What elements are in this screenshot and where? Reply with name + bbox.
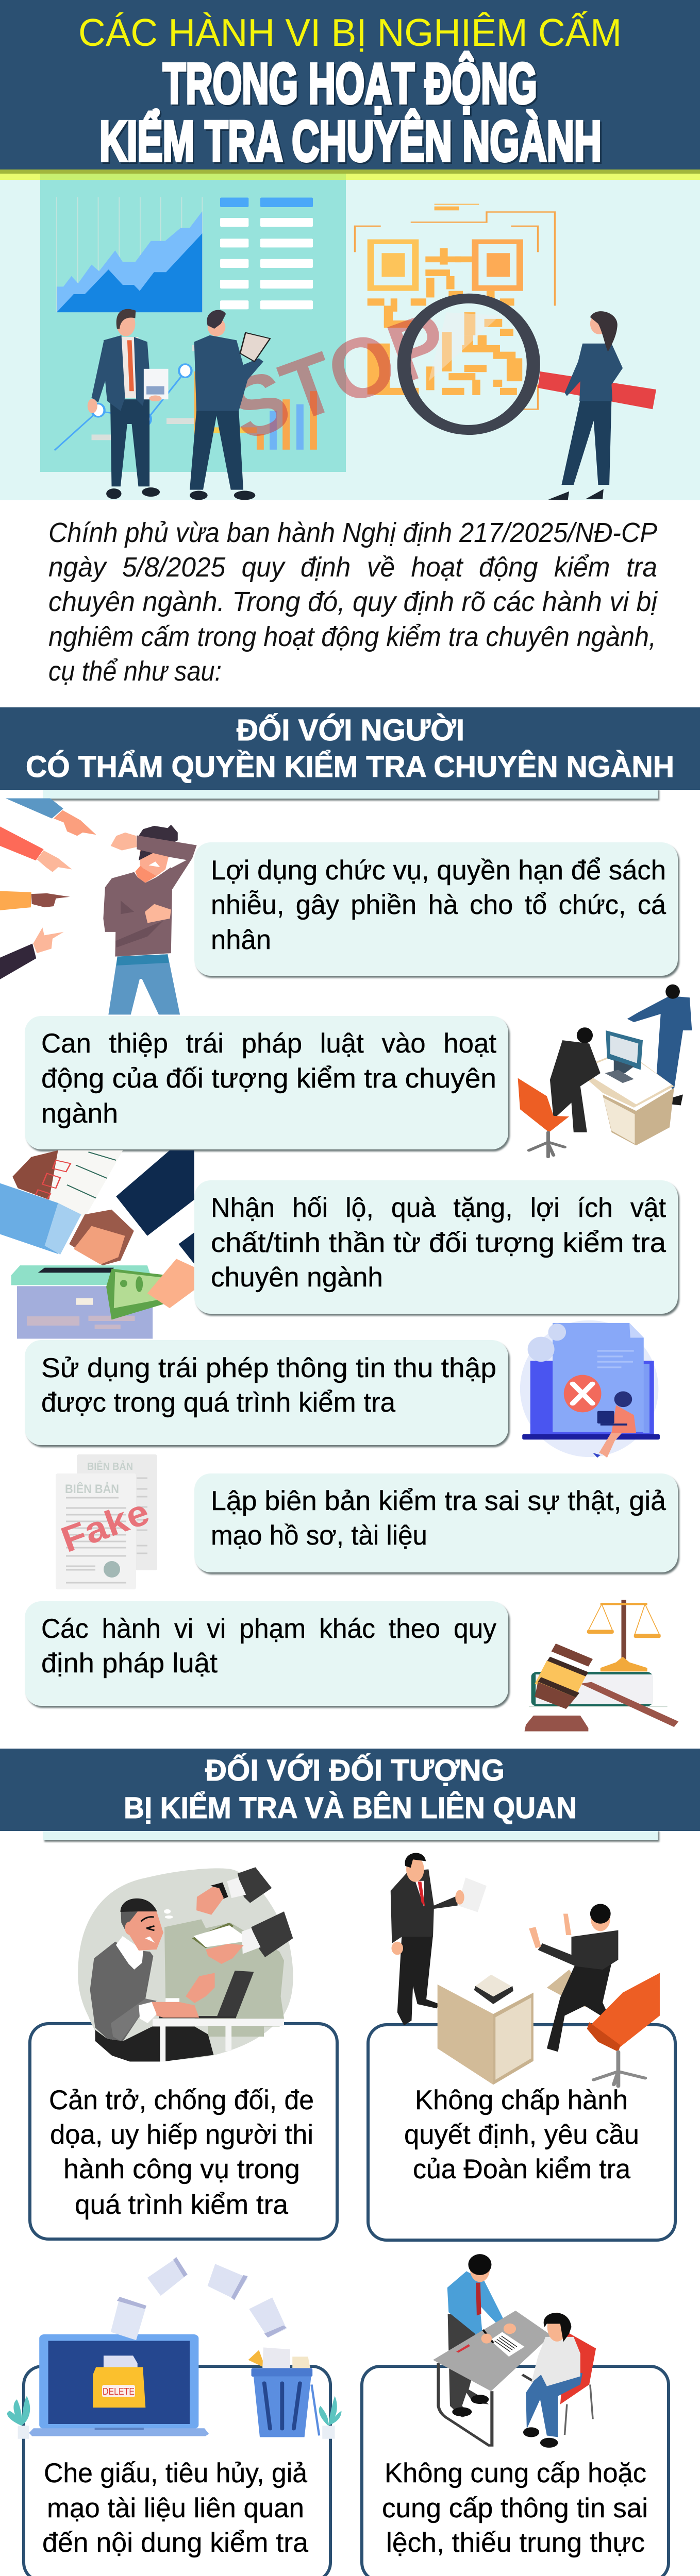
card 5: mạo hồ sơ, tài liệu [211, 1520, 427, 1551]
card 6: Các hành vi vi phạm khác theo quy [41, 1614, 496, 1644]
title line 1: CÁC HÀNH VI BỊ NGHIÊM CẤM [78, 11, 622, 54]
section header 1: CÓ THẨM QUYỀN KIỂM TRA CHUYÊN NGÀNH [26, 750, 674, 784]
card 2: Can thiệp trái pháp luật vào hoạt [41, 1028, 496, 1059]
card 3: chuyên ngành [211, 1262, 383, 1293]
section header 1: ĐỐI VỚI NGƯỜI [237, 714, 464, 747]
card 5: Lập biên bản kiểm tra sai sự thật, giả [211, 1486, 666, 1516]
icon: fake minutes documents: Fake [56, 1492, 154, 1560]
icon: bribery at ballot box [0, 1150, 194, 1338]
card 2 [25, 1016, 510, 1151]
card 5 [194, 1473, 679, 1574]
intro paragraph: Chính phủ vừa ban hành Nghị định 217/2025/NĐ-CP [48, 517, 657, 548]
section header 2: ĐỐI VỚI ĐỐI TƯỢNG [205, 1754, 505, 1787]
icon: rejected document and laptop [520, 1320, 660, 1458]
STOP stamp: STOP [217, 293, 460, 459]
box A: quá trình kiểm tra [75, 2190, 289, 2220]
icon: fake minutes documents: BIÊN BẢN [65, 1481, 119, 1496]
card 2: ngành [41, 1098, 118, 1129]
icon: refusing the inspection team [391, 1853, 660, 2087]
box A: dọa, uy hiếp người thi [50, 2120, 313, 2150]
card 2: động của đối tượng kiểm tra chuyên [41, 1063, 496, 1094]
icon: laptop deleting documents: DELETE [103, 2386, 135, 2397]
card 4: Sử dụng trái phép thông tin thu thập [41, 1353, 496, 1383]
intro paragraph: ngày 5/8/2025 quy định về hoạt động kiểm tra [48, 552, 657, 583]
intro paragraph [48, 517, 658, 687]
card 3: Nhận hối lộ, quà tặng, lợi ích vật [211, 1193, 666, 1223]
card 1: nhân [211, 925, 271, 955]
card 3: chất/tinh thần từ đối tượng kiểm tra [211, 1228, 666, 1258]
card 4 [25, 1340, 510, 1447]
icon: fake minutes documents: BIÊN BẢN [87, 1460, 133, 1472]
card 3 [194, 1180, 679, 1316]
section header 2 [0, 1749, 700, 1842]
card 6 [25, 1601, 510, 1708]
intro paragraph: nghiêm cấm trong hoạt động kiểm tra chuyên ngành, [48, 621, 656, 652]
box B: của Đoàn kiểm tra [413, 2154, 631, 2184]
box C [24, 2366, 330, 2576]
intro paragraph: cụ thể như sau: [48, 656, 222, 687]
people and magnifier [88, 298, 656, 500]
box D: lệch, thiếu trung thực [386, 2528, 645, 2558]
card 1: Lợi dụng chức vụ, quyền hạn để sách [211, 855, 666, 886]
icon: threatened inspector [78, 1867, 293, 2062]
box C: mạo tài liệu liên quan [47, 2493, 304, 2523]
icon: office desk scene [518, 985, 692, 1157]
box A: hành công vụ trong [63, 2154, 300, 2184]
section header 1 [0, 707, 700, 801]
hero illustration [0, 174, 700, 500]
card 4: được trong quá trình kiểm tra [41, 1387, 396, 1418]
box D [362, 2366, 669, 2576]
card 1 [194, 842, 679, 978]
card 6: định pháp luật [41, 1648, 218, 1679]
box B: quyết định, yêu cầu [404, 2120, 639, 2150]
box D: cung cấp thông tin sai [382, 2493, 648, 2523]
icon: man and woman at table [433, 2254, 596, 2448]
box D: Không cung cấp hoặc [385, 2458, 646, 2488]
box B: Không chấp hành [415, 2085, 628, 2115]
box C: Che giấu, tiêu hủy, giả [44, 2458, 308, 2488]
icon: gavel and scales [525, 1600, 678, 1731]
section header 2: BỊ KIỂM TRA VÀ BÊN LIÊN QUAN [124, 1791, 577, 1825]
QR code [355, 204, 555, 409]
icon: man accused by pointing hands [0, 799, 197, 1014]
icon: fake minutes documents [56, 1454, 157, 1589]
intro paragraph: chuyên ngành. Trong đó, quy định rõ các hành vi bị [48, 586, 658, 617]
box B [368, 2025, 675, 2240]
box A [30, 2024, 337, 2239]
chart and table [55, 197, 317, 450]
card 1: nhiễu, gây phiền hà cho tổ chức, cá [211, 890, 666, 920]
icon: laptop deleting documents [7, 2257, 341, 2439]
box A: Cản trở, chống đối, đe [49, 2085, 314, 2115]
box C: đến nội dung kiểm tra [42, 2528, 309, 2558]
header banner [0, 0, 700, 180]
